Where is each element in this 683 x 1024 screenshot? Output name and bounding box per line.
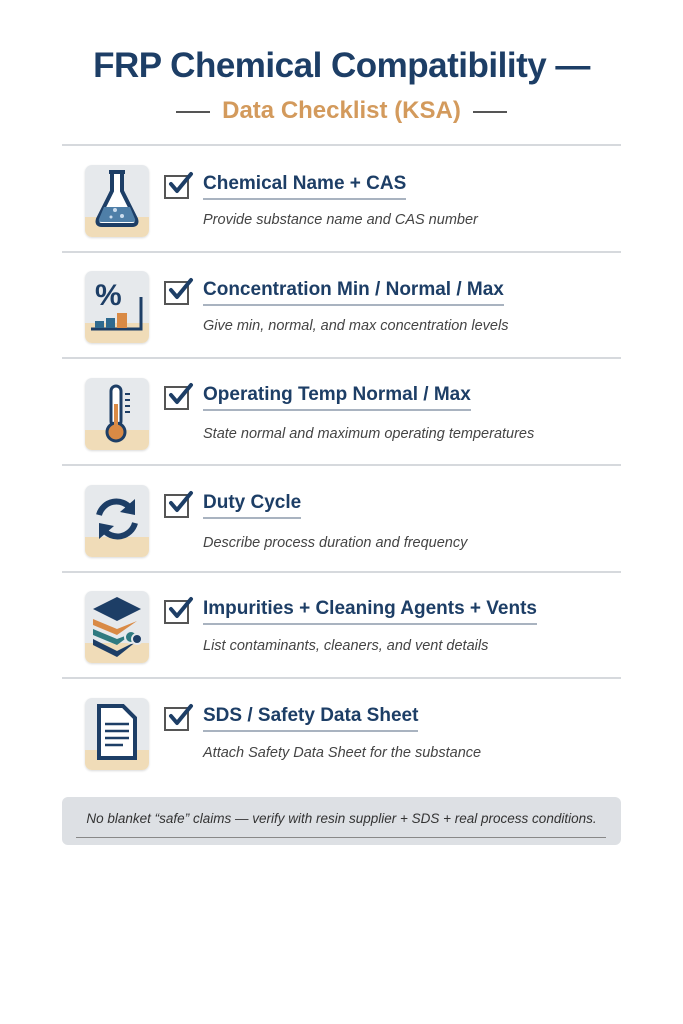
title: FRP Chemical Compatibility —	[93, 46, 590, 85]
description: State normal and maximum operating temperatures	[203, 426, 534, 442]
heading: Operating Temp Normal / Max	[203, 384, 471, 405]
description: Attach Safety Data Sheet for the substance	[203, 745, 481, 761]
checkbox	[164, 386, 189, 410]
row 6: SDS	[84, 698, 481, 772]
description: Describe process duration and frequency	[203, 535, 467, 551]
description: List contaminants, cleaners, and vent details	[203, 638, 488, 654]
row 4: duty cycle	[84, 485, 468, 559]
row 3: temperature	[84, 378, 534, 452]
description: Give min, normal, and max concentration levels	[203, 318, 508, 334]
row 5: impurities	[84, 591, 537, 665]
icon: document	[85, 698, 149, 770]
heading: Duty Cycle	[203, 492, 301, 513]
icon: layers	[85, 591, 149, 663]
subtitle: Data Checklist (KSA)	[222, 97, 461, 124]
checkbox	[164, 707, 189, 731]
heading: Concentration Min / Normal / Max	[203, 279, 504, 300]
row 2: concentration	[84, 271, 508, 345]
checkbox	[164, 281, 189, 305]
icon: thermometer	[85, 378, 149, 450]
heading: Chemical Name + CAS	[203, 173, 406, 194]
heading: SDS / Safety Data Sheet	[203, 705, 418, 726]
row 1: chemical name	[84, 165, 478, 239]
icon: percent bars: %	[95, 279, 122, 312]
icon: flask	[85, 165, 149, 237]
callout: disclaimer	[62, 797, 621, 845]
icon: cycle arrows	[85, 485, 149, 557]
description: Provide substance name and CAS number	[203, 212, 478, 228]
heading: Impurities + Cleaning Agents + Vents	[203, 598, 537, 619]
icon: percent bars	[85, 271, 149, 343]
checkbox	[164, 494, 189, 518]
checkbox	[164, 600, 189, 624]
checkbox	[164, 175, 189, 199]
callout: disclaimer: No blanket “safe” claims — verify with resin supplier + SDS + real process conditions.	[86, 811, 597, 826]
